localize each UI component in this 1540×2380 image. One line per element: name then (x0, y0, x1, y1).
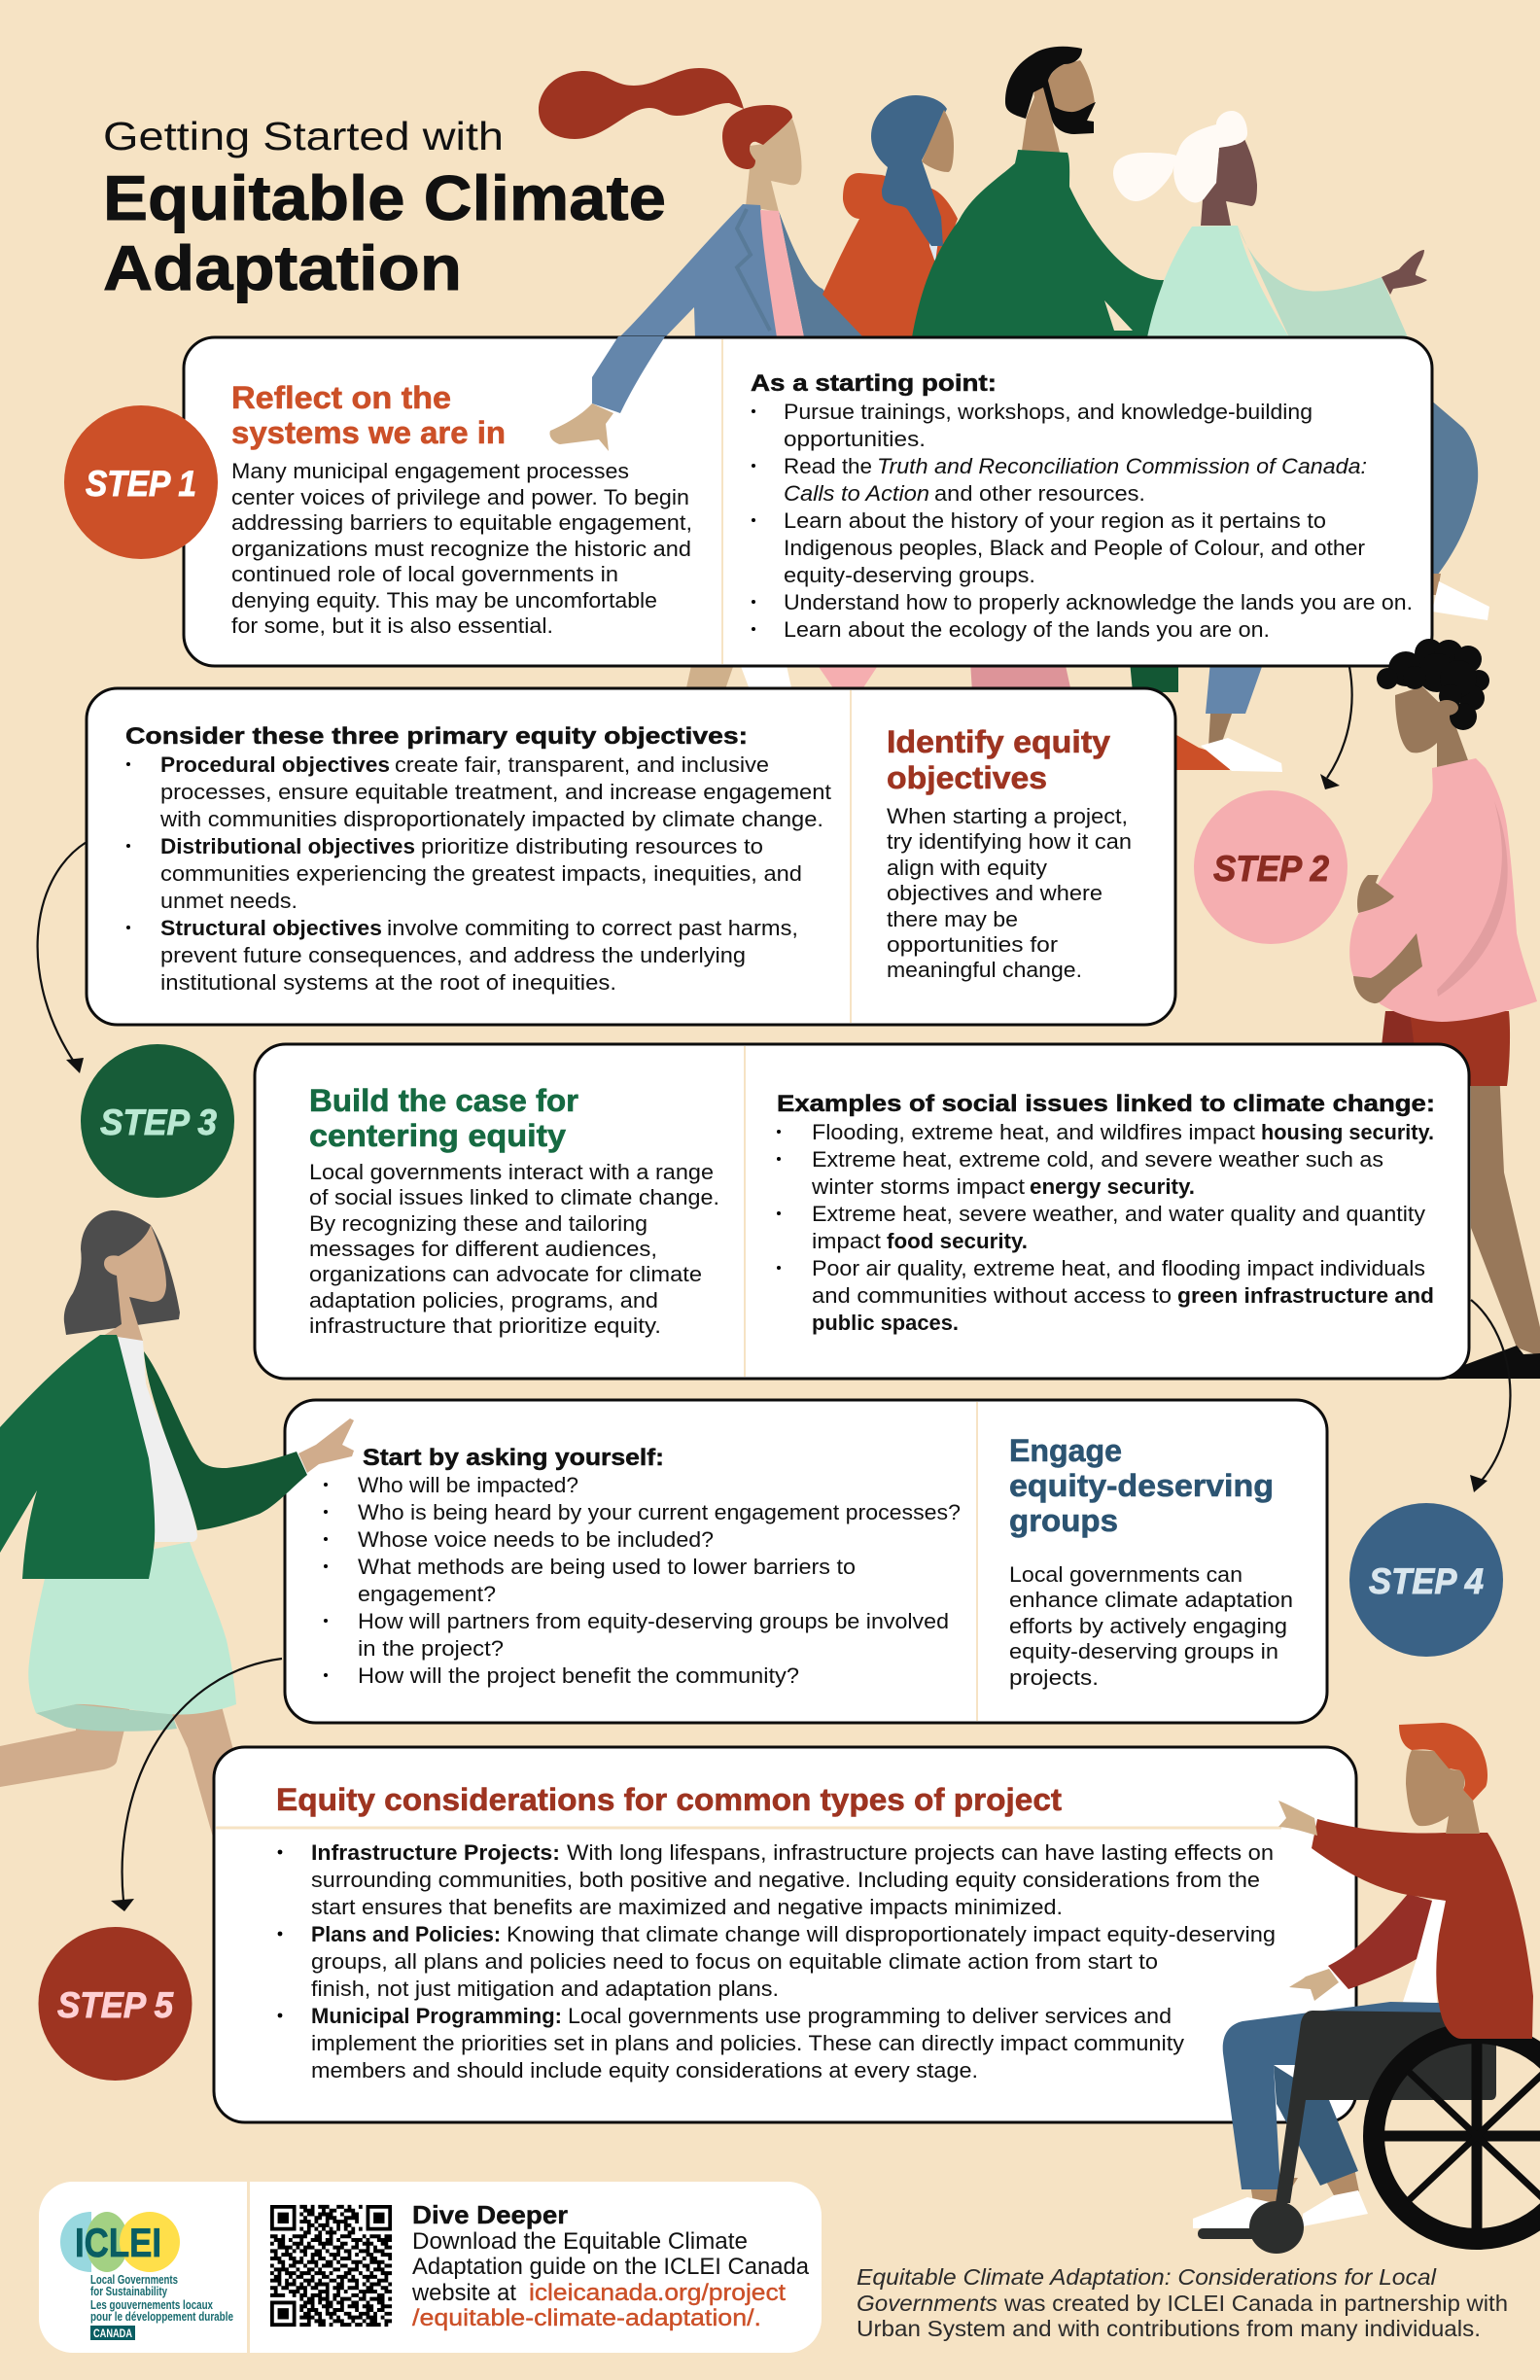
step badge 2: STEP 2 (1213, 849, 1329, 889)
text block: step 3 description: organizations can advocate for climate (309, 1262, 702, 1286)
text block: step 2 description: align with equity (887, 856, 1047, 880)
arrow: step 1 to step 2 (1320, 667, 1352, 789)
title: Equitable Climate (103, 162, 666, 233)
text block: dive deeper: website at (411, 2280, 516, 2306)
logo: ICLEI: CANADA (93, 2328, 132, 2340)
text block: step 1 description: Many municipal engagement processes (231, 459, 629, 483)
list: starting point actions: Learn about the ecology of the lands you are on. (784, 617, 1270, 642)
credits text: Urban System and with contributions from many individuals. (857, 2316, 1481, 2341)
logo: ICLEI: Les gouvernements locaux (90, 2298, 213, 2312)
list: equity objectives: Structural objectives (160, 916, 382, 940)
logo: ICLEI: ICLEI (75, 2220, 161, 2265)
heading: engage equity-deserving groups: Engage (1009, 1433, 1122, 1468)
text block: step 3 description: infrastructure that prioritize equity. (309, 1313, 661, 1338)
list: starting point actions: Calls to Action (784, 481, 929, 506)
list: starting point actions: equity-deserving groups. (784, 563, 1035, 587)
list: project types (278, 1840, 1276, 2082)
list: starting point actions: Indigenous peoples, Black and People of Colour, and other (784, 536, 1365, 560)
text block: step 4 description: efforts by actively engaging (1009, 1614, 1287, 1638)
title: Adaptation (103, 232, 462, 303)
text block: dive deeper: Download the Equitable Climate (412, 2228, 748, 2255)
text block: step 3 description (309, 1160, 719, 1338)
text block: step 1 description: denying equity. This may be uncomfortable (231, 588, 657, 612)
arrow: step 4 to step 5 (111, 1659, 282, 1911)
heading: reflect on the systems we are in: systems we are in (231, 415, 506, 450)
credits text: Governments (857, 2291, 998, 2316)
list: social issues: Flooding, extreme heat, and wildfires impact (812, 1120, 1255, 1144)
credits text: was created by ICLEI Canada in partnership with (1003, 2291, 1508, 2316)
text block: dive deeper: icleicanada.org/project (529, 2280, 786, 2306)
list: social issues: Poor air quality, extreme heat, and flooding impact individuals (812, 1256, 1425, 1280)
text block: dive deeper: Dive Deeper (412, 2200, 568, 2229)
panel: step 4 engage groups (285, 1400, 1327, 1723)
step badge 5 (39, 1927, 192, 2081)
illustration: woman in blue hijab (822, 95, 958, 337)
text block: step 2 description: try identifying how it can (887, 829, 1132, 854)
panel: step 1 reflect on the systems (184, 337, 1432, 666)
illustration: woman with red ponytail (539, 68, 863, 338)
list: project types: With long lifespans, infrastructure projects can have lasting effects on (567, 1840, 1274, 1865)
text block: step 3 description: By recognizing these and tailoring (309, 1211, 648, 1236)
step badge 4: STEP 4 (1369, 1561, 1484, 1601)
heading: consider three primary objectives: Consider these three primary equity objectives: (125, 723, 748, 750)
credits text: Equitable Climate Adaptation: Considerations for Local (857, 2264, 1437, 2290)
heading: start by asking yourself: Start by asking yourself: (363, 1445, 664, 1471)
list: project types: finish, not just mitigation and adaptation plans. (311, 1977, 779, 2001)
text block: step 1 description (231, 459, 692, 638)
list: equity objectives: involve commiting to correct past harms, (387, 916, 798, 940)
list: project types: Plans and Policies: (311, 1922, 501, 1946)
heading: engage equity-deserving groups: equity-deserving (1009, 1468, 1274, 1503)
logo: ICLEI: for Sustainability (90, 2285, 167, 2298)
list: project types: surrounding communities, both positive and negative. Including equity considerations from the (311, 1868, 1260, 1892)
text block: step 1 description: organizations must recognize the historic and (231, 537, 691, 561)
text block: step 1 description: continued role of local governments in (231, 562, 618, 586)
list: social issues: green infrastructure and (1177, 1283, 1434, 1308)
list: starting point actions: Pursue trainings, workshops, and knowledge-building (784, 400, 1312, 424)
list: starting point actions: Truth and Reconciliation Commission of Canada: (877, 454, 1367, 478)
list: project types: Infrastructure Projects: (311, 1840, 560, 1865)
list: equity objectives: processes, ensure equitable treatment, and increase engagement (160, 780, 831, 804)
list: starting point actions: opportunities. (784, 427, 926, 451)
illustration: bearded man in green sweater (912, 47, 1164, 337)
list: social issues: food security. (887, 1229, 1028, 1253)
text block: step 3 description: adaptation policies, programs, and (309, 1288, 658, 1312)
list: project types: start ensures that benefits are maximized and negative impacts minimized. (311, 1895, 1063, 1919)
text block: dive deeper (411, 2200, 810, 2331)
illustration: green jacket sleeve and hand (144, 1351, 354, 1530)
list: equity objectives: Distributional objectives (160, 834, 415, 858)
panel: step 2 identify equity objectives (87, 688, 1175, 1025)
list: project types: groups, all plans and policies need to focus on equitable climate action from start to (311, 1949, 1158, 1974)
list: social issues (777, 1120, 1434, 1335)
title: Getting Started with (103, 114, 504, 158)
list: equity objectives: with communities disproportionately impacted by climate change. (159, 807, 823, 831)
list: equity objectives (126, 752, 831, 995)
list: social issues: energy security. (1030, 1174, 1195, 1199)
text block: step 4 description: projects. (1009, 1665, 1099, 1690)
list: project types: Knowing that climate change will disproportionately impact equity-deserving (507, 1922, 1276, 1946)
heading: equity considerations: Equity considerations for common types of project (276, 1782, 1062, 1817)
heading: reflect on the systems we are in: Reflect on the (231, 380, 451, 415)
list: equity objectives: institutional systems at the root of inequities. (160, 970, 616, 995)
list: project types: Local governments use programming to deliver services and (568, 2004, 1172, 2028)
heading: build the case for centering equity: Build the case for (309, 1083, 578, 1118)
list: equity objectives: create fair, transparent, and inclusive (395, 752, 769, 777)
heading: reflect on the systems we are in (231, 380, 506, 450)
text block: dive deeper: /equitable-climate-adaptation/. (412, 2305, 761, 2331)
panel: step 3 build the case (255, 1044, 1469, 1379)
heading: identify equity objectives: Identify equity (887, 724, 1110, 759)
text block: step 1 description: for some, but it is also essential. (231, 613, 553, 638)
list: starting point actions: and other resources. (934, 481, 1145, 506)
list: equity objectives: Procedural objectives (160, 752, 390, 777)
text block: step 1 description: addressing barriers to equitable engagement, (231, 510, 692, 535)
step badge 1: STEP 1 (86, 464, 196, 504)
list: questions: Who is being heard by your current engagement processes? (358, 1500, 961, 1524)
step badge 3: STEP 3 (100, 1102, 217, 1142)
list: questions: How will the project benefit the community? (358, 1663, 799, 1688)
text block: step 4 description: equity-deserving groups in (1009, 1639, 1278, 1663)
list: questions: engagement? (358, 1582, 496, 1606)
list: equity objectives: unmet needs. (160, 889, 298, 913)
heading: identify equity objectives (887, 724, 1110, 795)
text block: step 2 description: opportunities for (887, 932, 1058, 957)
list: starting point actions: Learn about the history of your region as it pertains to (784, 508, 1326, 533)
list: starting point actions (752, 400, 1413, 642)
title (103, 114, 666, 303)
text block: step 2 description: objectives and where (887, 881, 1102, 905)
heading: as a starting point: As a starting point: (751, 370, 997, 397)
heading: build the case for centering equity: centering equity (309, 1118, 566, 1153)
list: social issues: winter storms impact (811, 1174, 1025, 1199)
step badge 3 (81, 1044, 234, 1198)
list: questions: in the project? (358, 1636, 504, 1661)
list: equity objectives: prioritize distributing resources to (421, 834, 763, 858)
list: questions: What methods are being used to lower barriers to (358, 1555, 856, 1579)
list: social issues: public spaces. (812, 1311, 959, 1335)
arrow: step 2 to step 3 (38, 842, 87, 1073)
illustration: pregnant woman body (1349, 686, 1540, 1379)
step badge 4 (1349, 1503, 1503, 1657)
list: questions: How will partners from equity-deserving groups be involved (358, 1609, 949, 1633)
list: social issues: impact (812, 1229, 881, 1253)
step badge 1 (64, 405, 218, 559)
heading: engage equity-deserving groups: groups (1009, 1503, 1118, 1538)
list: questions: Who will be impacted? (358, 1473, 578, 1497)
panel: footer dive deeper (39, 2182, 822, 2353)
logo: ICLEI: pour le développement durable (90, 2310, 233, 2324)
illustration: elderly woman in mint top (1113, 111, 1427, 337)
list: questions: Whose voice needs to be included? (358, 1527, 714, 1552)
list: social issues: housing security. (1261, 1120, 1434, 1144)
illustration: woman in green jacket (0, 1210, 236, 1847)
arrow: step 3 to step 4 (1470, 1300, 1510, 1492)
text block: step 4 description (1009, 1562, 1293, 1690)
credits text (857, 2264, 1508, 2341)
list: starting point actions: Read the (784, 454, 872, 478)
list: project types: implement the priorities set in plans and policies. These can directly impact community (311, 2031, 1184, 2055)
list: social issues: Extreme heat, severe weather, and water quality and quantity (812, 1202, 1425, 1226)
list: equity objectives: communities experiencing the greatest impacts, inequities, and (160, 861, 802, 886)
heading: build the case for centering equity (309, 1083, 578, 1153)
step badge 5: STEP 5 (57, 1985, 174, 2025)
illustration: man in wheelchair (1193, 1723, 1540, 2254)
heading: examples of social issues: Examples of social issues linked to climate change: (777, 1091, 1435, 1117)
text block: step 2 description: When starting a project, (887, 804, 1128, 828)
text block: step 4 description: enhance climate adaptation (1009, 1588, 1293, 1612)
panel: step 5 equity considerations (214, 1747, 1356, 2122)
list: starting point actions: Understand how to properly acknowledge the lands you are on. (784, 590, 1413, 614)
list: project types: members and should include equity considerations at every stage. (311, 2058, 978, 2082)
text block: step 3 description: Local governments interact with a range (309, 1160, 714, 1184)
text block: dive deeper: Adaptation guide on the ICLEI Canada (412, 2254, 810, 2280)
list: equity objectives: prevent future consequences, and address the underlying (160, 943, 746, 967)
logo: ICLEI (60, 2212, 233, 2340)
text block: step 2 description (887, 804, 1132, 982)
illustration: red-haired woman's arm and hand over panel (549, 336, 665, 451)
text block: step 1 description: center voices of privilege and power. To begin (231, 485, 689, 509)
logo: ICLEI: Local Governments (90, 2273, 178, 2287)
list: social issues: Extreme heat, extreme cold, and severe weather such as (812, 1147, 1383, 1172)
list: project types: Municipal Programming: (311, 2004, 562, 2028)
heading: identify equity objectives: objectives (887, 760, 1047, 795)
text block: step 2 description: there may be (887, 907, 1018, 931)
text block: step 3 description: messages for different audiences, (309, 1237, 657, 1261)
illustration: legs between step 1 and step 2 panels (685, 399, 1489, 772)
text block: step 4 description: Local governments can (1009, 1562, 1242, 1587)
illustration: pregnant woman curly hair (1377, 639, 1489, 730)
QR code (270, 2207, 392, 2325)
step badge 2 (1194, 790, 1348, 944)
list: social issues: and communities without access to (812, 1283, 1172, 1308)
list: questions (324, 1473, 961, 1688)
text block: step 3 description: of social issues linked to climate change. (309, 1185, 719, 1209)
text block: step 2 description: meaningful change. (887, 958, 1082, 982)
heading: engage equity-deserving groups (1009, 1433, 1274, 1538)
